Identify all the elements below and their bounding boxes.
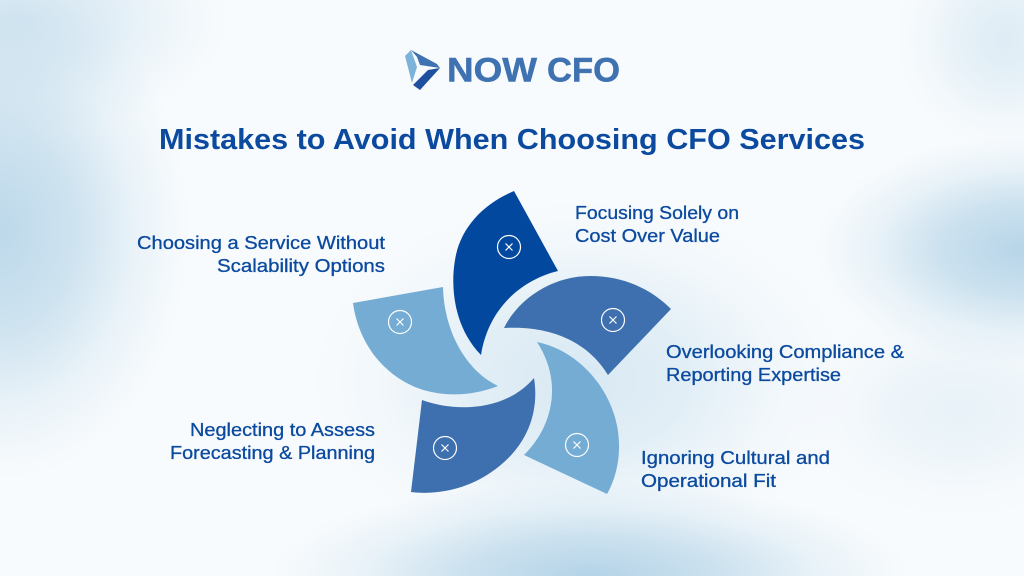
label: overlooking compliance: Reporting Expertise [666, 365, 841, 385]
petal: focusing solely on cost [453, 191, 558, 355]
icon: x circle [602, 308, 624, 332]
label: ignoring cultural fit: Operational Fit [641, 471, 776, 491]
logo wordmark [447, 52, 620, 90]
icon: x circle [498, 236, 520, 258]
diagram: five petal pinwheel [353, 191, 671, 494]
label: overlooking compliance [666, 342, 904, 385]
label: choosing service without scalability: Choosing a Service Without [137, 233, 385, 253]
petal: choosing without scalability [353, 287, 498, 394]
label: neglecting to assess forecasting: Neglecting to Assess [190, 420, 375, 440]
petal: overlooking compliance [504, 276, 671, 375]
icon: x circle [388, 310, 412, 334]
logo wordmark: CFO [547, 52, 620, 90]
label: focusing solely on cost over value: Focusing Solely on [575, 203, 739, 223]
icon: x circle [566, 434, 588, 456]
icon: logo arrow [405, 50, 440, 90]
logo: NOW CFO [405, 50, 620, 90]
label: ignoring cultural fit [641, 448, 830, 491]
label: ignoring cultural fit: Ignoring Cultural and [641, 448, 830, 468]
label: focusing solely on cost over value: Cost Over Value [575, 226, 720, 246]
petal: neglecting forecasting [411, 378, 535, 493]
label: neglecting to assess forecasting: Forecasting & Planning [170, 443, 375, 463]
label: neglecting to assess forecasting [170, 420, 375, 463]
logo wordmark: NOW [447, 52, 538, 90]
icon: x circle [434, 436, 456, 460]
petal: ignoring cultural fit [524, 342, 619, 494]
label: choosing service without scalability [137, 233, 385, 276]
label: focusing solely on cost over value [575, 203, 739, 246]
label: overlooking compliance: Overlooking Compliance & [666, 342, 904, 362]
label: choosing service without scalability: Scalability Options [217, 256, 385, 276]
title: Mistakes to Avoid When Choosing CFO Services [159, 124, 865, 156]
